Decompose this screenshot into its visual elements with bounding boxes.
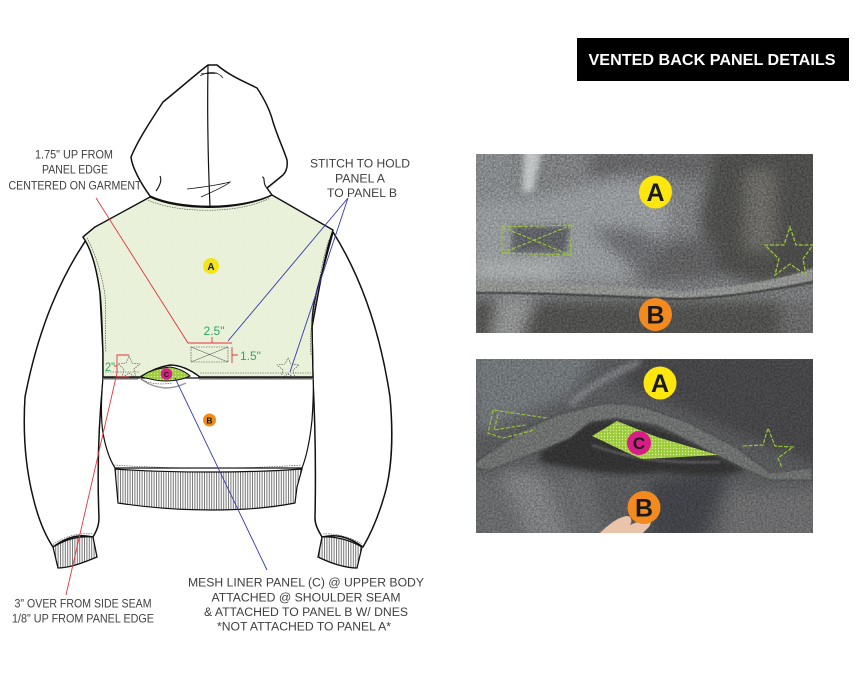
lifted flap hem	[476, 404, 812, 480]
bar tack box stitch	[191, 347, 228, 362]
marker C	[627, 431, 651, 455]
label: panel A marker	[203, 258, 219, 274]
note: centre placement: PANEL EDGE	[42, 162, 108, 176]
right sleeve	[312, 232, 392, 547]
dimension 2.5 in: 2.5"	[204, 324, 224, 338]
fingers	[600, 516, 651, 533]
blue leader: mesh liner	[175, 378, 267, 570]
left star stitch	[118, 356, 140, 378]
marker A: A	[651, 370, 669, 398]
hood centre seam and details	[156, 65, 267, 207]
stitched star overlay	[743, 428, 793, 468]
right star stitch	[277, 358, 299, 378]
note: centre placement: 1.75" UP FROM	[35, 148, 113, 162]
left sleeve	[24, 227, 103, 547]
hem rib	[115, 469, 302, 510]
blue leaders: stitch to hold	[228, 198, 348, 372]
dark interior under flap	[540, 420, 747, 476]
marker A: A	[646, 179, 665, 207]
note: stitch to hold: PANEL A	[335, 172, 386, 186]
note: star placement	[12, 596, 154, 626]
note: star placement: 3" OVER FROM SIDE SEAM	[14, 596, 152, 610]
photo: panel closed	[476, 154, 813, 333]
note: mesh liner	[188, 576, 424, 634]
left cuff	[53, 537, 97, 568]
marker C: C	[633, 434, 645, 453]
label: panel B marker: B	[206, 416, 213, 426]
note: stitch to hold	[310, 156, 410, 200]
marker B	[628, 491, 660, 524]
note: stitch to hold: STITCH TO HOLD	[310, 156, 410, 170]
note: centre placement: CENTERED ON GARMENT	[8, 178, 142, 192]
label: panel C marker	[161, 368, 172, 380]
hoodie back flat sketch	[24, 65, 392, 568]
note: star placement: 1/8" UP FROM PANEL EDGE	[12, 612, 154, 626]
dimension 2 in: 2"	[105, 360, 115, 374]
hood	[131, 65, 287, 206]
marker B: B	[635, 494, 653, 522]
title banner	[577, 38, 849, 81]
note: mesh liner: ATTACHED @ SHOULDER SEAM	[212, 590, 400, 604]
note: stitch to hold: TO PANEL B	[327, 186, 397, 200]
fold	[476, 268, 813, 298]
right cuff	[318, 537, 362, 568]
panel A mesh yoke	[83, 195, 333, 377]
marker B	[639, 298, 672, 331]
label: panel B marker	[203, 414, 216, 426]
label: panel A marker: A	[207, 262, 215, 273]
stitched box overlay	[488, 410, 547, 438]
note: mesh liner: *NOT ATTACHED TO PANEL A*	[217, 620, 391, 634]
stitched star overlay	[765, 227, 813, 275]
label: panel C marker: C	[164, 370, 170, 379]
marker A	[644, 366, 676, 400]
note: centre placement	[8, 148, 142, 192]
panel B lower body	[102, 378, 313, 468]
note: mesh liner: & ATTACHED TO PANEL B W/ DNES	[204, 605, 408, 619]
vent opening with mesh C	[139, 367, 190, 388]
photo: panel lifted	[476, 359, 813, 533]
mesh liner C	[592, 421, 718, 459]
note: mesh liner: MESH LINER PANEL (C) @ UPPER BODY	[188, 576, 424, 590]
topstitching	[51, 198, 362, 546]
stitched box overlay	[502, 225, 572, 255]
title banner: VENTED BACK PANEL DETAILS	[588, 52, 836, 69]
red leader: centre stitch placement	[96, 198, 238, 363]
dimension 1.5 in: 1.5"	[240, 349, 261, 363]
marker A	[639, 176, 672, 208]
marker B: B	[646, 302, 665, 330]
red leader: star placement	[66, 355, 129, 595]
